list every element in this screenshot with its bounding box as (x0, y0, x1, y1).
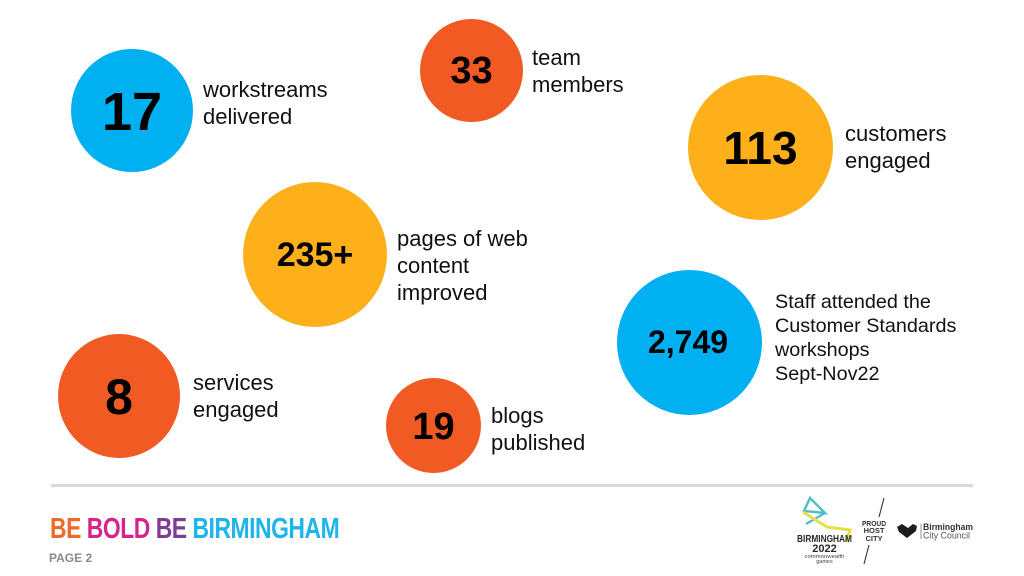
circle: 17: 17 (102, 82, 162, 142)
label: workstreams delivered: workstreams (203, 77, 328, 102)
circle: 113 (688, 75, 833, 220)
circle: 2,749: 2,749 (648, 324, 728, 360)
label: staff attended workshops: Sept-Nov22 (775, 363, 879, 385)
logo: Proud Host City (862, 498, 887, 564)
circle: 235+: 235+ (277, 236, 353, 274)
circle: 235+ (243, 182, 387, 327)
label: blogs published: blogs (491, 403, 544, 428)
circle: 8: 8 (105, 369, 133, 425)
logo: Proud Host City: HOST (864, 526, 885, 535)
circle: 17 (71, 49, 193, 172)
stat: 33 team members (420, 19, 624, 122)
stat: 17 workstreams (71, 49, 328, 172)
label: workstreams delivered (203, 77, 328, 129)
logo: Birmingham 2022: games (816, 559, 833, 565)
label: blogs published: published (491, 430, 585, 455)
circle: 33: 33 (450, 50, 493, 92)
circle: 19: 19 (412, 406, 455, 448)
circle: 113: 113 (723, 122, 798, 174)
label: pages of web content improved: pages of web (397, 226, 528, 251)
label: team members: team (532, 45, 581, 70)
logo: Birmingham 2022: 2022 (812, 543, 837, 555)
label: customers engaged: engaged (845, 148, 931, 173)
label: staff attended workshops: workshops (775, 339, 870, 361)
stat: 2,749 staff (617, 270, 956, 415)
logo: Proud Host City: PROUD (862, 519, 887, 528)
circle: 33 (420, 19, 523, 122)
label: pages of web content improved: content (397, 253, 469, 278)
logo: Birmingham City Council (897, 522, 973, 542)
label: workstreams delivered: delivered (203, 104, 292, 129)
label: pages of web content improved (397, 226, 528, 305)
label: team members (532, 45, 624, 97)
stat: 19 blogs (386, 378, 585, 473)
label: team members: members (532, 72, 624, 97)
logo: Proud Host City: CITY (865, 534, 883, 543)
label: staff attended workshops: Staff attended the (775, 291, 931, 313)
stat: 113 customers (688, 75, 946, 220)
logo: Birmingham 2022: commonwealth (804, 554, 844, 560)
logo: Birmingham City Council: Birmingham (923, 522, 973, 533)
label: blogs published (491, 403, 585, 455)
label: customers engaged (845, 121, 946, 173)
label: customers engaged: customers (845, 121, 946, 146)
circle: 2,749 (617, 270, 762, 415)
label: pages of web content improved: improved (397, 280, 487, 305)
slogan: Be Bold Be Birmingham: BE BOLD BE BIRMINGHAM (50, 513, 339, 545)
circle: 8 (58, 334, 180, 458)
label: staff attended workshops (775, 291, 956, 385)
page number: PAGE 2 (49, 551, 92, 565)
stat: 8 services (58, 334, 279, 458)
label: services engaged (193, 370, 279, 422)
label: staff attended workshops: Customer Standards (775, 315, 956, 337)
logo: Birmingham City Council: City Council (923, 530, 970, 542)
label: services engaged: engaged (193, 397, 279, 422)
label: services engaged: services (193, 370, 274, 395)
circle: 19 (386, 378, 481, 473)
footer divider (51, 484, 973, 487)
logo: Birmingham 2022 (797, 496, 852, 565)
stat: 235+ pages (243, 182, 528, 327)
